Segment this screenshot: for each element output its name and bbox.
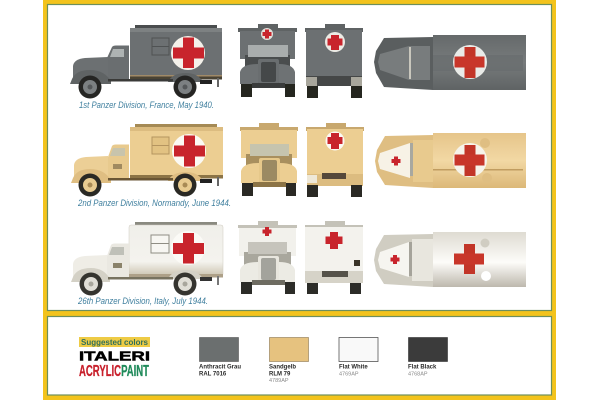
top view: white	[374, 232, 526, 287]
logo: Italeri acrylic paint	[79, 337, 150, 380]
swatch: Anthracit Grau: Anthracit Grau	[199, 364, 241, 370]
swatch: Sandgelb: Sandgelb	[269, 364, 296, 370]
side view: sand	[71, 124, 223, 196]
top view: grey	[374, 35, 526, 90]
swatch: Sandgelb: RLM 79	[269, 372, 291, 378]
red cross emblem	[172, 134, 206, 168]
rear wheel	[174, 76, 196, 98]
rear view: white	[305, 221, 363, 294]
side view: white	[71, 222, 223, 296]
caption: 26th Panzer: 26th Panzer Division, Italy, July 1944.	[77, 296, 208, 306]
front view: sand	[240, 123, 298, 196]
front wheel	[78, 76, 102, 98]
rear view: grey	[305, 24, 363, 98]
swatch: Flat White: Flat White	[339, 364, 368, 370]
panel: suggested colors	[48, 316, 552, 395]
rear wheel	[174, 272, 196, 296]
caption: 1st Panzer: 1st Panzer Division, France, May 1940.	[79, 100, 214, 110]
front view: grey	[238, 24, 297, 97]
front wheel	[80, 272, 102, 296]
row: sand truck	[71, 123, 526, 208]
swatch: Flat Black: 4768AP	[408, 372, 428, 378]
swatch: Flat Black: Flat Black	[408, 364, 437, 370]
top view: sand	[375, 133, 526, 188]
caption: 2nd Panzer: 2nd Panzer Division, Normandy, June 1944.	[77, 198, 231, 208]
rear view: sand	[306, 123, 364, 197]
Acrylic Paint wordmark: ACRYLICPAINT	[79, 363, 149, 380]
swatch: Anthracit Grau	[199, 338, 241, 378]
rear wheel	[174, 174, 196, 196]
swatch: Sandgelb: 4789AP	[269, 378, 289, 384]
swatch: Sandgelb	[269, 338, 308, 384]
red cross emblem	[171, 36, 205, 70]
Italeri wordmark: ITALERI	[79, 348, 150, 364]
side view: grey	[70, 25, 222, 98]
swatch: Anthracit Grau: RAL 7016	[199, 372, 227, 378]
front view: white	[238, 221, 297, 294]
front wheel	[78, 174, 102, 196]
swatch: Flat White: 4769AP	[339, 372, 359, 378]
suggested colors tag: Suggested colors	[81, 338, 149, 347]
panel: vehicles	[48, 4, 552, 310]
row: grey truck	[70, 24, 526, 110]
row: white truck	[71, 221, 526, 306]
swatch: Flat Black	[408, 338, 448, 378]
swatch: Flat White	[339, 338, 378, 378]
red cross	[171, 231, 205, 265]
